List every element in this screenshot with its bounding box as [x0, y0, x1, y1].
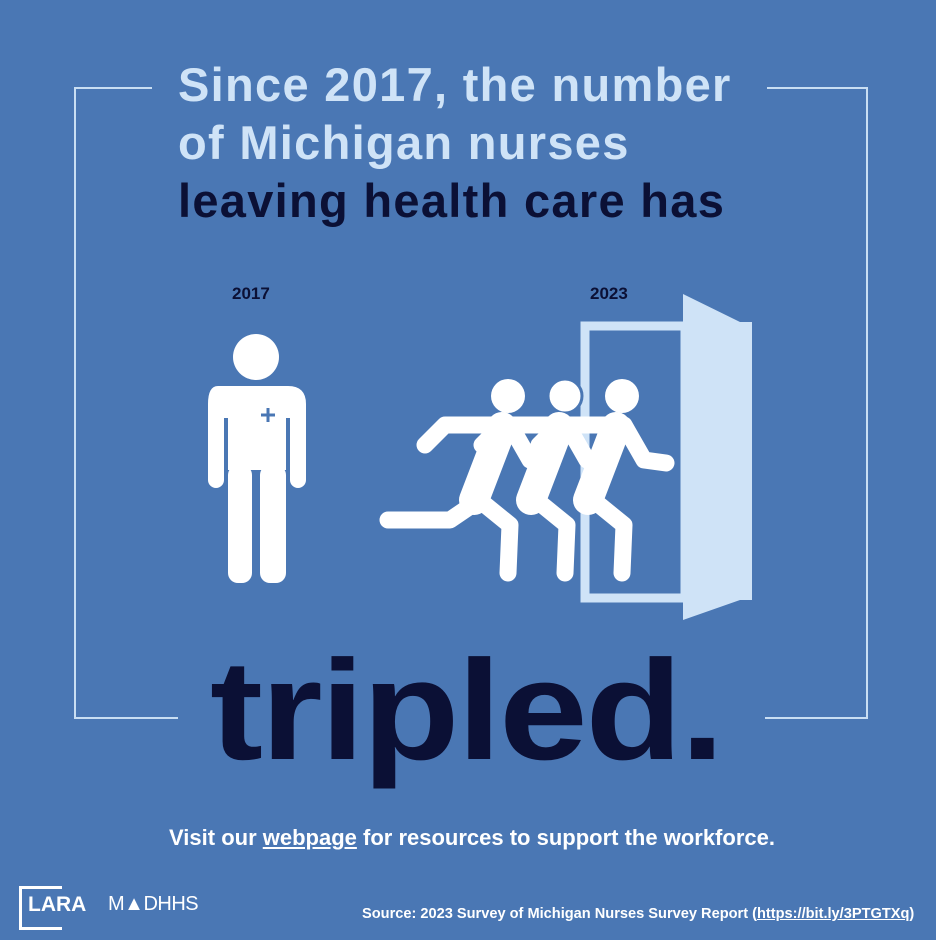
label: 2023: 2023: [590, 284, 628, 303]
title: of Michigan nurses: [178, 116, 630, 169]
logo: LARA: [19, 886, 62, 930]
icon: nurse: [208, 334, 306, 583]
runners: [388, 379, 666, 573]
icon: runners exiting door: [380, 294, 752, 620]
label: 2017: 2017: [232, 284, 270, 303]
source text: Source: 2023 Survey of Michigan Nurses Survey Report (https://bit.ly/3PTGTXq): [362, 906, 914, 922]
title: [178, 58, 732, 227]
door panel: [683, 294, 752, 620]
title: Since 2017, the number: [178, 58, 732, 111]
logo: MDHHS: M▲DHHS: [108, 893, 198, 915]
text: LARA: [28, 893, 86, 916]
door frame: [585, 326, 685, 598]
headline: tripled: tripled.: [210, 631, 722, 790]
call to action text: Visit our webpage for resources to support the workforce.: [169, 825, 775, 850]
title: leaving health care has: [178, 174, 725, 227]
